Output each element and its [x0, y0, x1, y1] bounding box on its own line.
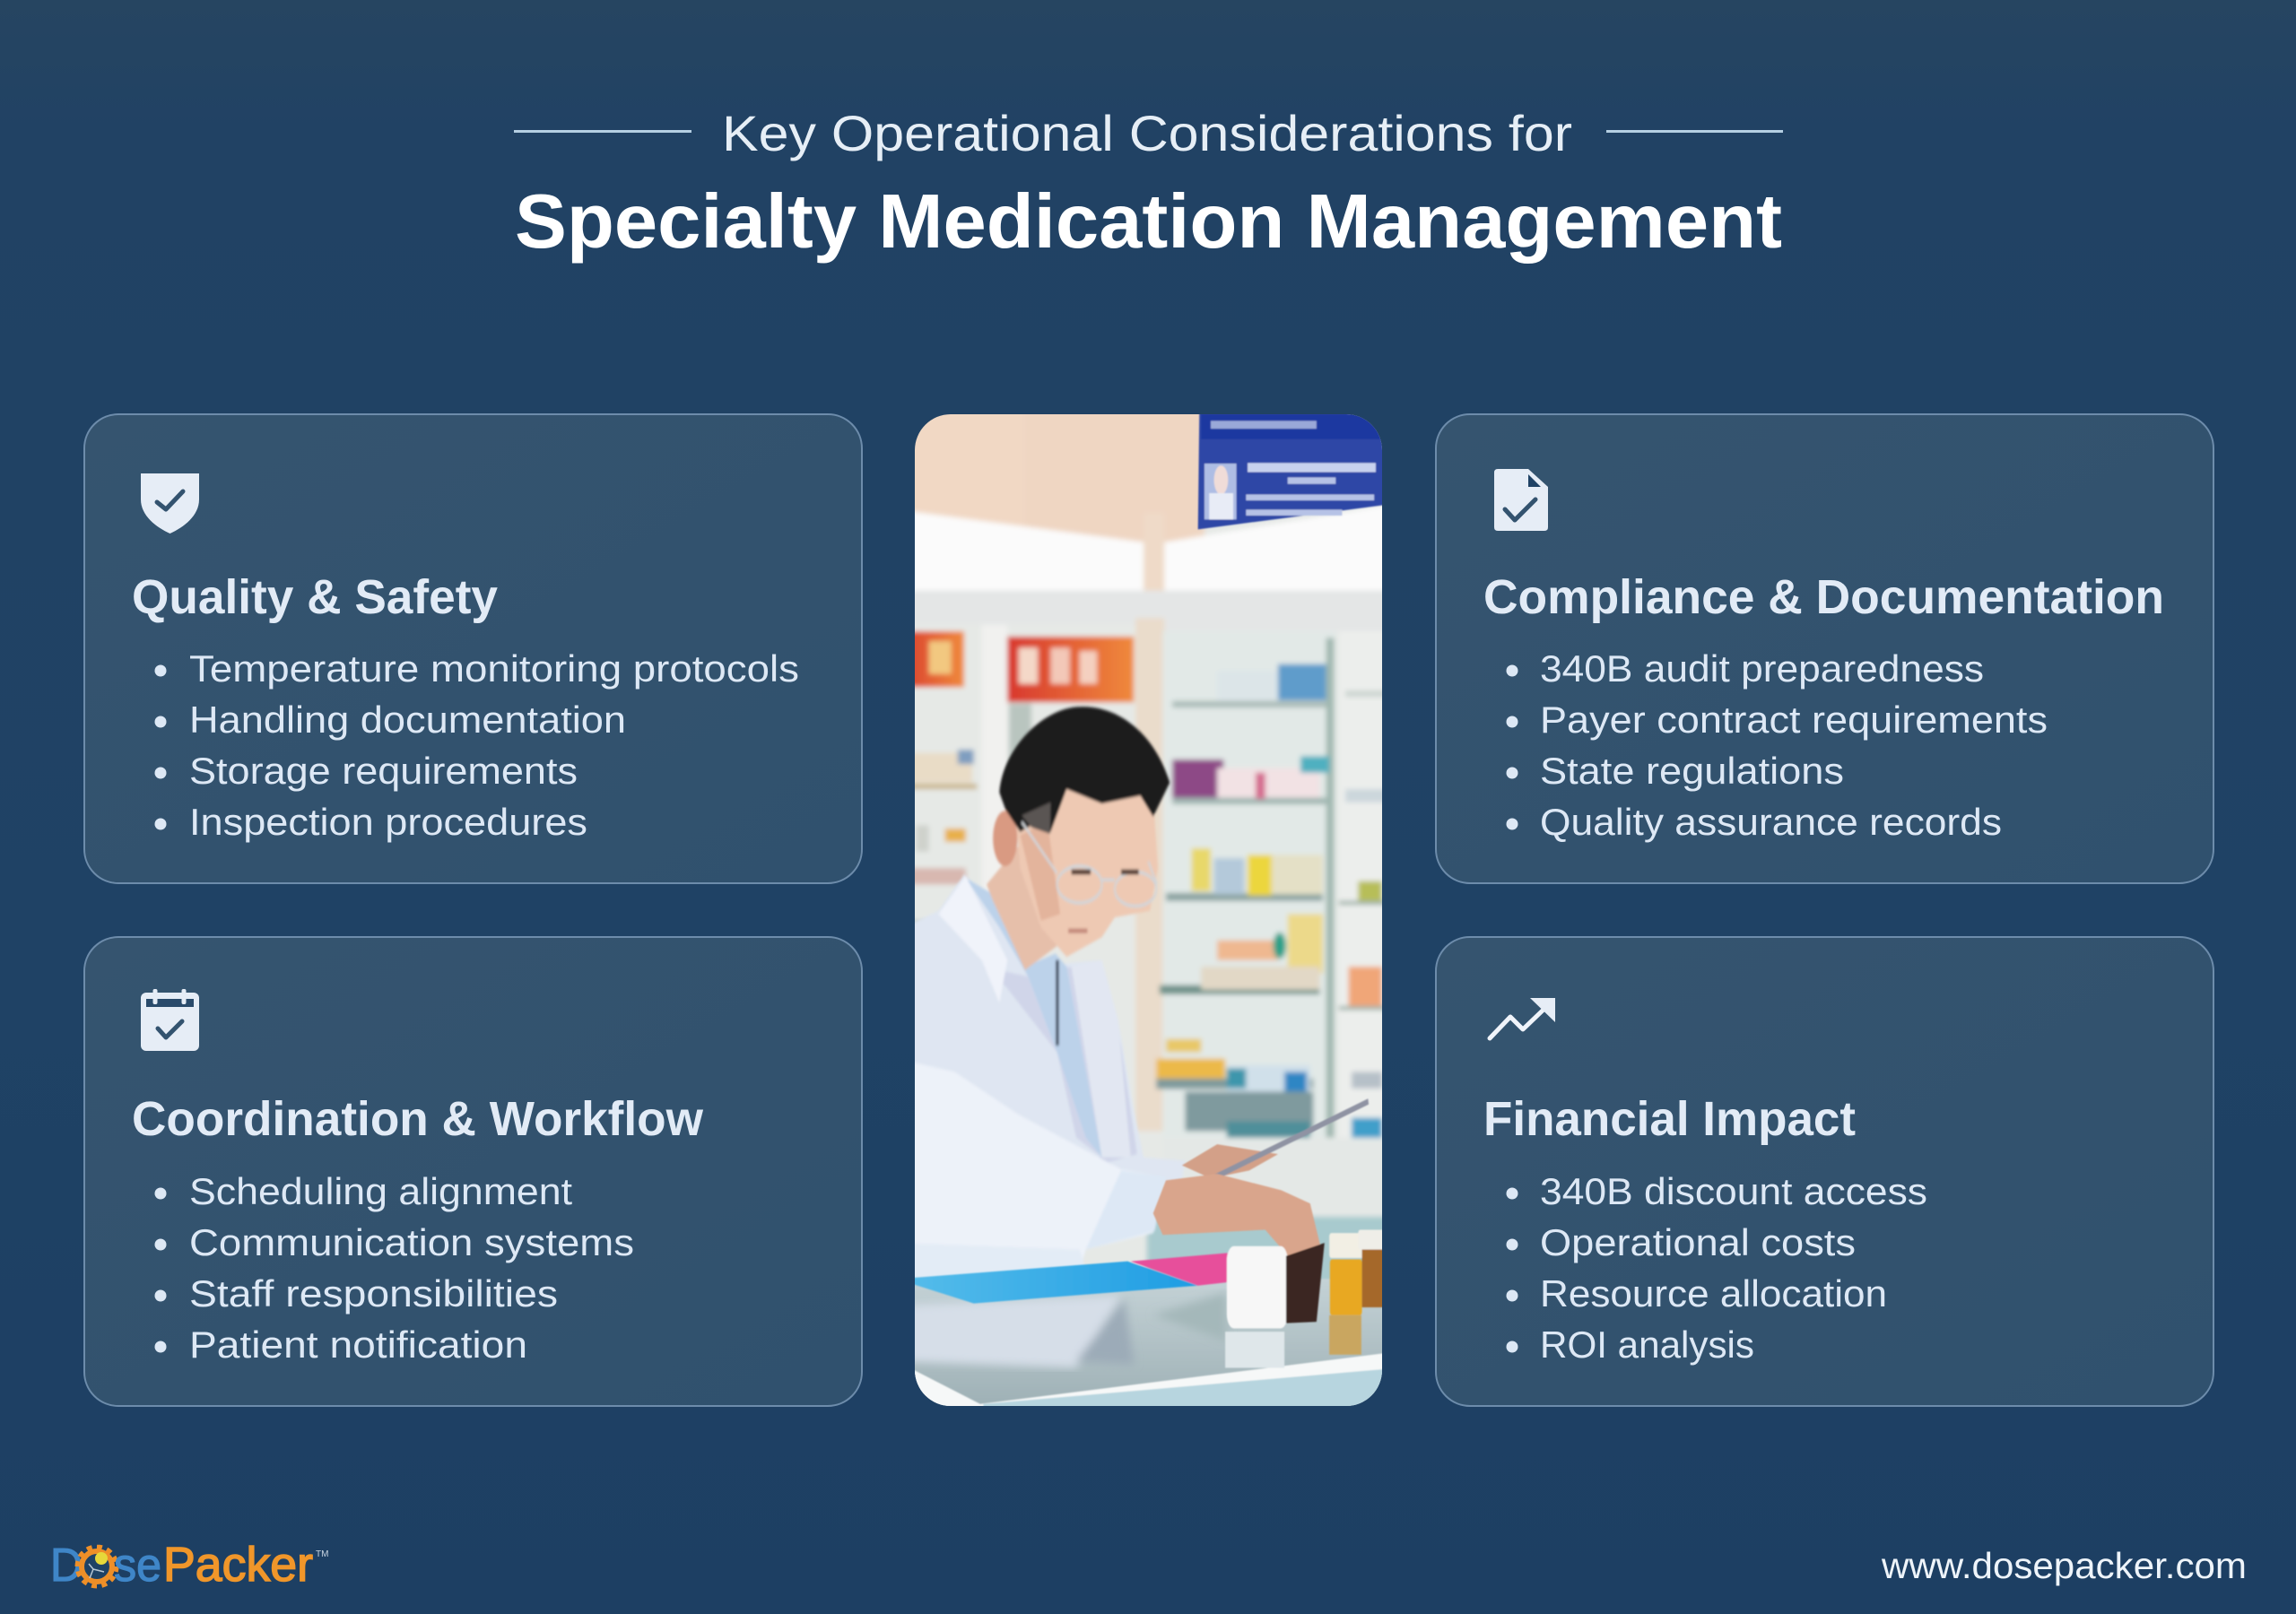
panel: Coordination & Workflow — [84, 937, 862, 1406]
neck — [987, 842, 1060, 970]
logo: DosePacker: D — [50, 1540, 83, 1592]
lapel — [938, 876, 1007, 1002]
list: Financial Impact: Operational costs — [1540, 1221, 1856, 1263]
logo: DosePacker: se — [114, 1540, 161, 1592]
list: Financial Impact: ROI analysis — [1540, 1323, 1754, 1366]
list: Compliance & Documentation: Quality assurance records — [1540, 801, 2002, 843]
icon: calendar check — [141, 989, 199, 1051]
icon: logo gear — [77, 1547, 117, 1586]
ear — [993, 811, 1017, 866]
hair — [999, 707, 1170, 832]
sleeve — [915, 1063, 1121, 1255]
left title rule — [514, 130, 691, 133]
title: Specialty Medication Management — [515, 179, 1782, 265]
coat inner shade — [1004, 967, 1137, 1162]
glasses — [1022, 822, 1157, 907]
list: Quality & Safety: Inspection procedures — [189, 801, 587, 843]
heading: Financial Impact: Financial Impact — [1483, 1092, 1856, 1146]
counter reflections — [897, 1292, 1227, 1367]
heading: Compliance & Documentation: Compliance & Documentation — [1483, 570, 2164, 624]
sign — [1196, 414, 1382, 531]
icon: document check — [1494, 469, 1548, 531]
subtitle: Key Operational Considerations for — [722, 105, 1572, 161]
list: Quality & Safety — [154, 647, 799, 843]
coat body — [915, 874, 1184, 1180]
list: Quality & Safety: Handling documentation — [189, 699, 626, 741]
icon: shield check — [141, 473, 199, 534]
logo: DosePacker — [50, 1538, 328, 1592]
list: Quality & Safety: Storage requirements — [189, 750, 578, 792]
photo: pharmacist at pharmacy counter — [915, 414, 1382, 1406]
list: Coordination & Workflow — [154, 1170, 634, 1366]
mouth — [1068, 929, 1087, 933]
panel: Quality & Safety — [84, 414, 862, 883]
eyes — [1072, 870, 1091, 874]
list: Financial Impact — [1507, 1170, 1927, 1366]
tablet and hands — [915, 1098, 1382, 1406]
list: Financial Impact: 340B discount access — [1540, 1170, 1927, 1212]
list: Compliance & Documentation: Payer contract requirements — [1540, 699, 2048, 741]
list: Compliance & Documentation — [1507, 647, 2048, 843]
list: Coordination & Workflow: Patient notification — [189, 1323, 527, 1366]
right title rule — [1606, 130, 1783, 133]
website url: www.dosepacker.com — [1881, 1545, 2247, 1586]
counter and bottles — [915, 1279, 1382, 1406]
panel: Compliance & Documentation — [1436, 414, 2213, 883]
icon: trend arrow — [1490, 998, 1555, 1038]
pharmacist figure — [897, 707, 1185, 1282]
panel: Financial Impact — [1436, 937, 2213, 1406]
list: Quality & Safety: Temperature monitoring protocols — [189, 647, 799, 690]
logo: DosePacker: TM — [316, 1549, 328, 1559]
face — [1015, 789, 1158, 957]
list: Compliance & Documentation: State regulations — [1540, 750, 1844, 792]
photo background: blurred shelves — [915, 414, 1382, 1406]
list: Coordination & Workflow: Staff responsibilities — [189, 1272, 558, 1315]
list: Compliance & Documentation: 340B audit preparedness — [1540, 647, 1984, 690]
logo: DosePacker: o — [84, 1540, 111, 1592]
list: Coordination & Workflow: Communication systems — [189, 1221, 634, 1263]
logo: DosePacker: Packer — [163, 1538, 313, 1592]
heading: Quality & Safety: Quality & Safety — [132, 570, 498, 624]
heading: Coordination & Workflow: Coordination & Workflow — [132, 1092, 704, 1146]
list: Coordination & Workflow: Scheduling alignment — [189, 1170, 572, 1212]
header — [514, 105, 1783, 265]
list: Financial Impact: Resource allocation — [1540, 1272, 1887, 1315]
shirt — [966, 878, 1102, 1158]
